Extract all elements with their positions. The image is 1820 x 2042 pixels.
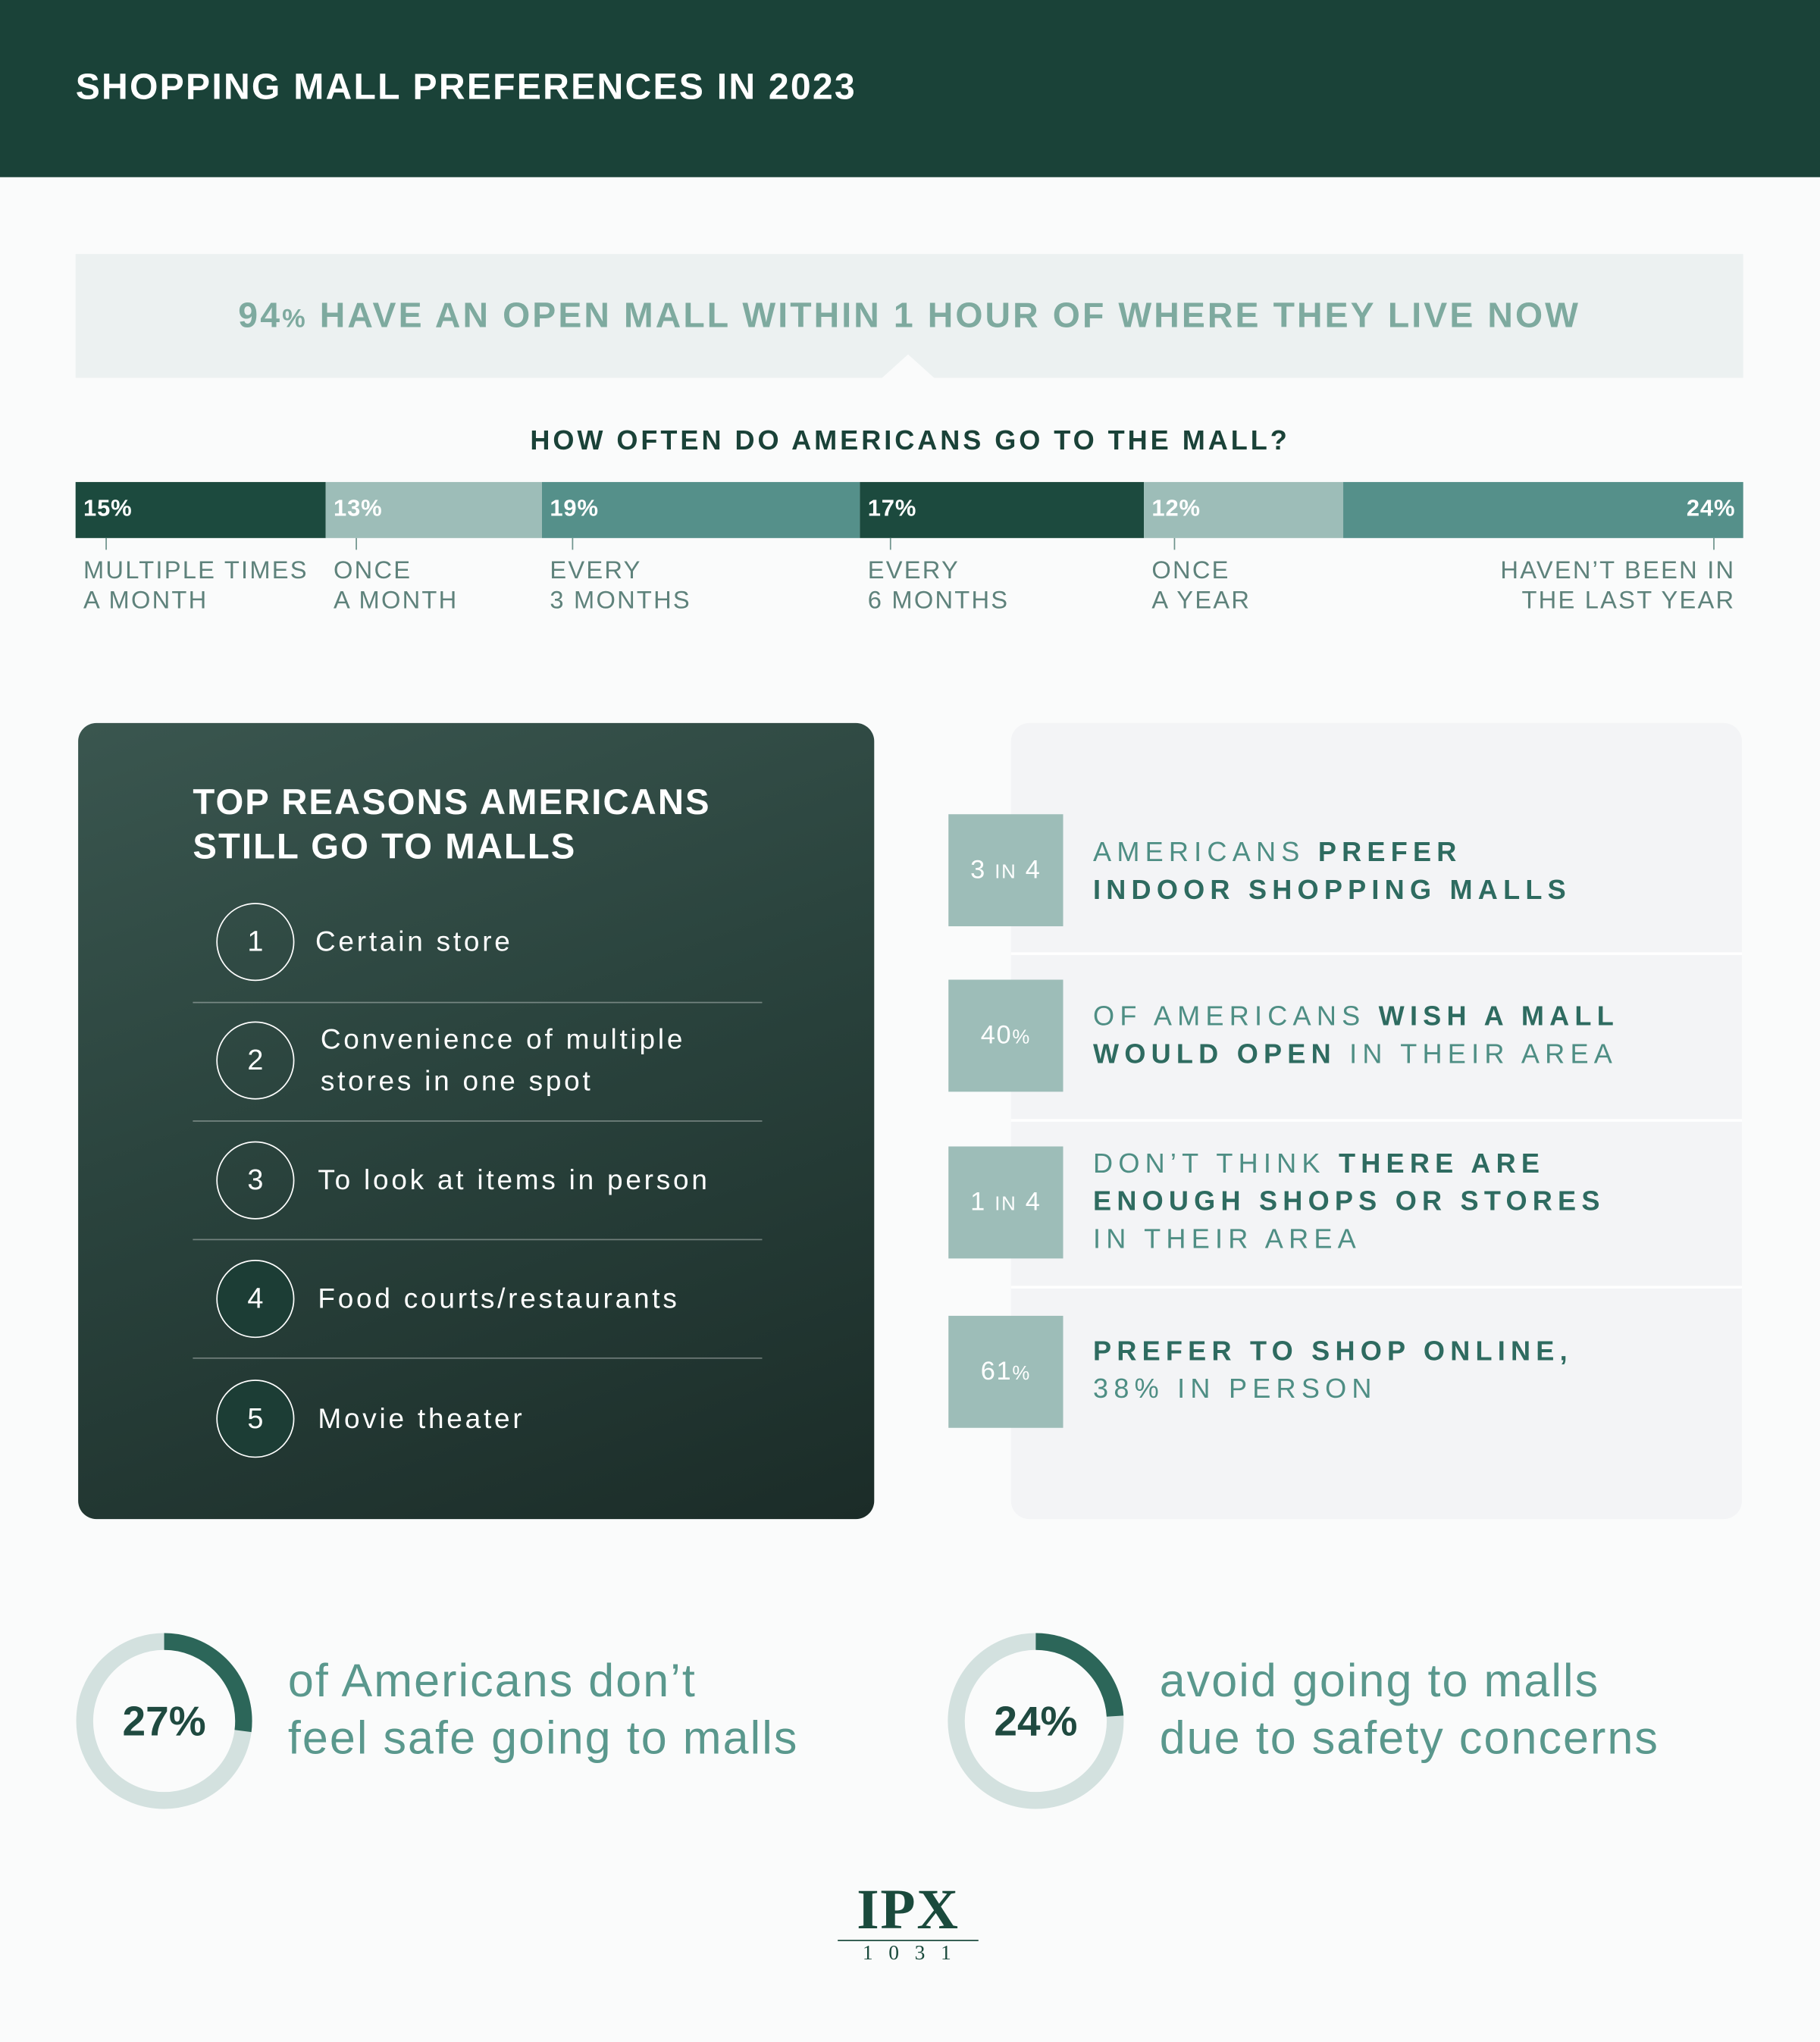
stacked bar: 19%	[550, 495, 599, 521]
stats rows: 40%	[981, 1022, 1031, 1050]
stats rows: WOULD OPEN IN THEIR AREA	[1093, 1040, 1618, 1070]
banner	[76, 254, 1743, 377]
reasons list: To look at items in person	[318, 1165, 710, 1196]
reasons list: 3	[247, 1164, 263, 1196]
text: avoid malls: due to safety concerns	[1160, 1712, 1659, 1764]
panel title: STILL GO TO MALLS	[193, 826, 576, 866]
stats rows: DON’T THINK THERE ARE	[1093, 1149, 1545, 1179]
text: avoid malls: avoid going to malls	[1160, 1655, 1599, 1707]
stacked bar: A MONTH	[334, 587, 458, 615]
stacked bar: ONCE	[334, 558, 412, 585]
text: feel unsafe: of Americans don’t	[288, 1655, 697, 1707]
donut: 27%	[76, 1633, 252, 1809]
stacked bar: MULTIPLE TIMES	[83, 558, 309, 585]
title: SHOPPING MALL PREFERENCES IN 2023	[76, 67, 857, 107]
logo: IPX	[857, 1878, 960, 1941]
stacked bar: EVERY	[868, 558, 960, 585]
stats rows: IN THEIR AREA	[1093, 1225, 1361, 1254]
banner text: 94% HAVE AN OPEN MALL WITHIN 1 HOUR OF WHERE THEY LIVE NOW	[238, 296, 1580, 335]
stacked bar: HAVEN’T BEEN IN	[1500, 558, 1735, 585]
stats rows: 3 IN 4	[970, 856, 1042, 885]
donut: 24%: 24%	[994, 1697, 1077, 1744]
panel: top reasons	[78, 723, 874, 1519]
stacked bar: 3 MONTHS	[550, 587, 691, 615]
stats rows: INDOOR SHOPPING MALLS	[1093, 875, 1571, 906]
header bar	[0, 0, 1820, 177]
stats rows: AMERICANS PREFER	[1093, 838, 1462, 868]
stacked bar: 15%	[83, 495, 133, 521]
text: feel unsafe	[288, 1655, 798, 1764]
stats rows: OF AMERICANS WISH A MALL	[1093, 1002, 1619, 1032]
stacked bar	[76, 482, 1743, 615]
stacked bar: ONCE	[1151, 558, 1230, 585]
reasons list: Convenience of multiple	[321, 1024, 685, 1055]
stacked bar: 13%	[334, 495, 383, 521]
reasons list: 2	[247, 1044, 263, 1076]
stacked bar: A YEAR	[1151, 587, 1251, 615]
stats rows: ENOUGH SHOPS OR STORES	[1093, 1187, 1605, 1217]
stacked bar: 17%	[868, 495, 916, 521]
reasons list: Certain store	[315, 926, 513, 957]
panel title: TOP REASONS AMERICANS	[193, 781, 711, 822]
panel title	[193, 781, 711, 866]
reasons list: stores in one spot	[321, 1066, 594, 1097]
text: feel unsafe: feel safe going to malls	[288, 1712, 798, 1764]
stacked bar: 24%	[1687, 495, 1735, 521]
stats rows	[948, 814, 1742, 1428]
panel: stats	[1011, 723, 1742, 1519]
reasons list: 1	[247, 925, 263, 957]
stats rows: 1 IN 4	[970, 1189, 1042, 1217]
stacked bar: 12%	[1151, 495, 1201, 521]
stacked bar: 6 MONTHS	[868, 587, 1009, 615]
stacked bar: A MONTH	[83, 587, 208, 615]
stats rows: 38% IN PERSON	[1093, 1374, 1377, 1405]
reasons list: Movie theater	[318, 1403, 525, 1434]
banner notch	[882, 355, 934, 377]
chart heading: HOW OFTEN DO AMERICANS GO TO THE MALL?	[530, 426, 1290, 456]
text: avoid malls	[1160, 1655, 1659, 1764]
reasons list: Food courts/restaurants	[318, 1283, 680, 1314]
logo	[838, 1878, 979, 1965]
logo: 1031	[863, 1943, 966, 1965]
reasons list: 5	[247, 1402, 263, 1434]
donut: 27%: 27%	[123, 1697, 206, 1744]
stats rows: 61%	[981, 1358, 1031, 1386]
stacked bar: THE LAST YEAR	[1521, 587, 1735, 615]
reasons list	[193, 903, 763, 1458]
donut: 24%	[948, 1633, 1123, 1809]
reasons list: 4	[247, 1282, 263, 1314]
stacked bar: EVERY	[550, 558, 642, 585]
stats rows: PREFER TO SHOP ONLINE,	[1093, 1336, 1573, 1367]
